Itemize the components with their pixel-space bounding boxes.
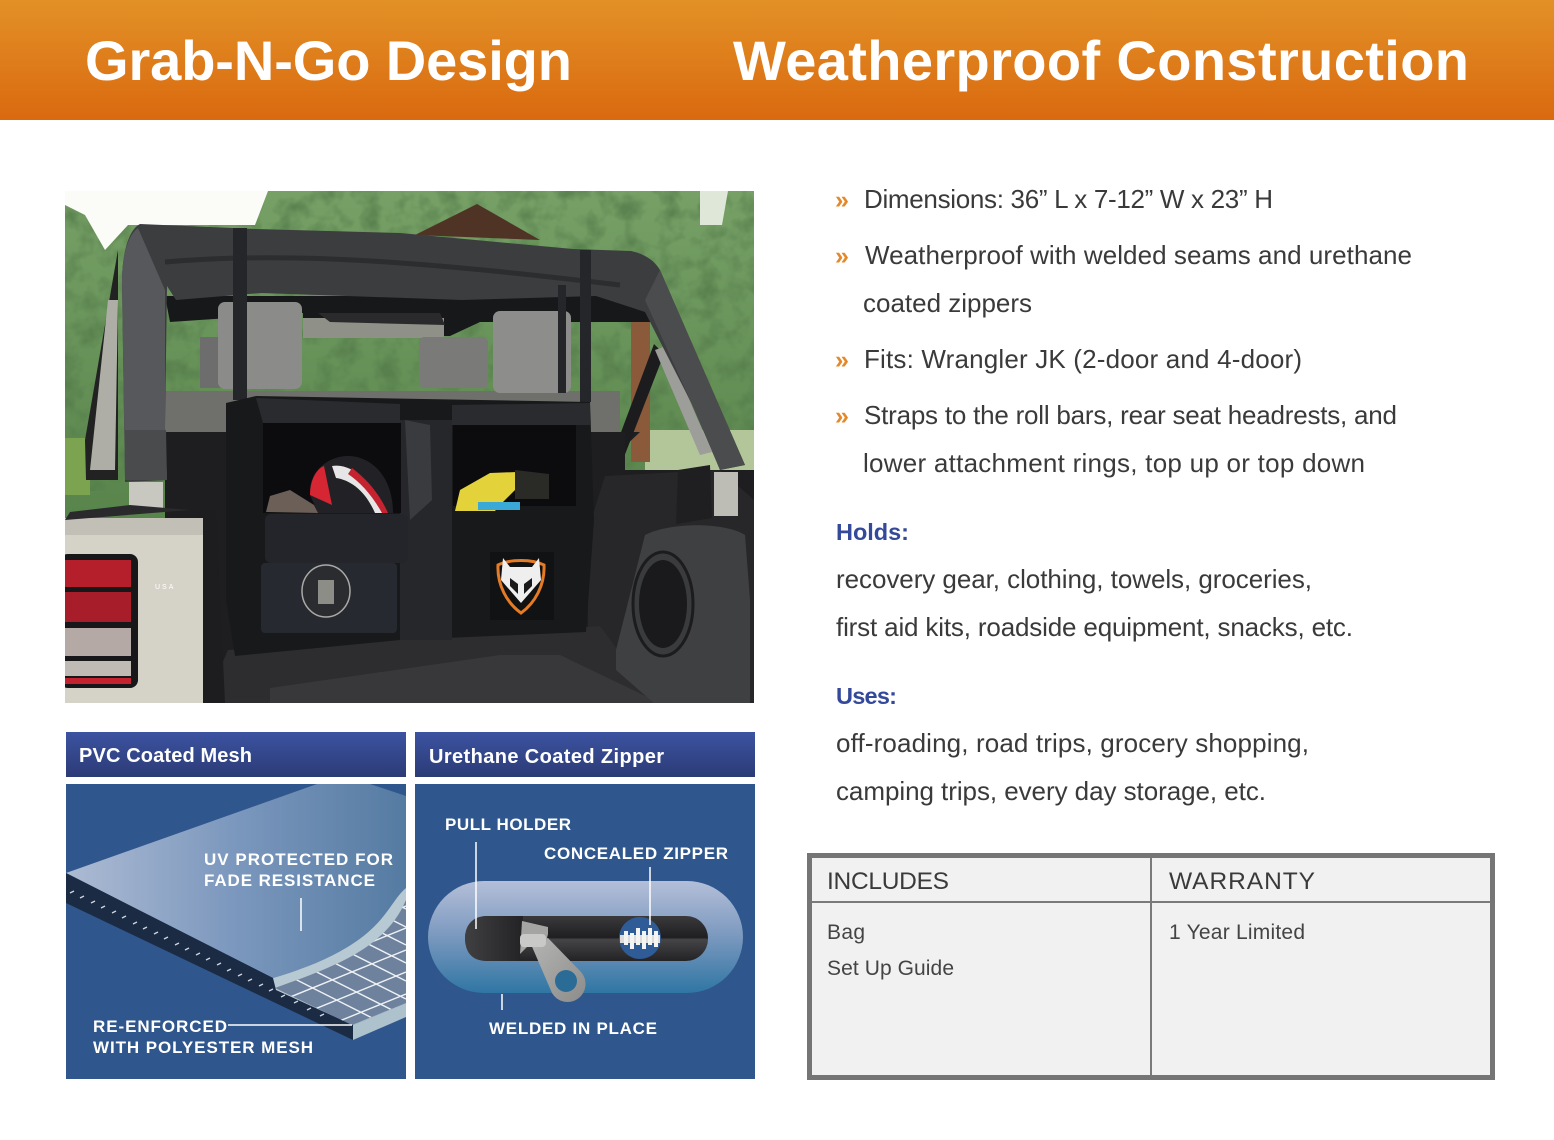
header bar: Urethane Coated Zipper bbox=[415, 732, 755, 777]
callout: polyester mesh: WITH POLYESTER MESH bbox=[93, 1038, 313, 1057]
roll pocket bbox=[265, 514, 408, 563]
tailgate: USA bbox=[155, 584, 175, 591]
callout: pull holder: PULL HOLDER bbox=[445, 815, 571, 834]
callout: UV protection: UV PROTECTED FOR bbox=[204, 850, 393, 869]
interior dark base bbox=[216, 432, 754, 662]
callout: concealed zipper: CONCEALED ZIPPER bbox=[544, 844, 728, 863]
callout: UV protection bbox=[204, 850, 393, 931]
label: Urethane Coated Zipper: Urethane Coated Zipper bbox=[429, 746, 664, 768]
column: warranty: 1 Year Limited bbox=[1169, 921, 1305, 944]
bullet: weatherproof bbox=[835, 240, 1412, 318]
tail light bbox=[60, 554, 138, 688]
rear seat bbox=[165, 391, 625, 470]
column: warranty bbox=[1169, 868, 1315, 944]
heading: Grab-N-Go Design: Grab-N-Go Design bbox=[85, 29, 572, 92]
logo pocket panel bbox=[490, 552, 554, 620]
column: includes bbox=[827, 868, 954, 980]
mesh layer bbox=[273, 888, 406, 1040]
bullet: weatherproof: Weatherproof with welded seams and urethane bbox=[865, 240, 1412, 270]
wolf shield logo bbox=[498, 558, 544, 613]
text block: uses bbox=[836, 683, 1309, 806]
black storage bag bbox=[226, 396, 594, 656]
helmet bbox=[310, 456, 393, 513]
label: PVC Coated Mesh: PVC Coated Mesh bbox=[79, 745, 252, 767]
sleeping bag roll bbox=[261, 563, 397, 633]
top coated sheet bbox=[66, 784, 406, 978]
diagram: PVC coated mesh bbox=[66, 784, 406, 1079]
diagram: urethane coated zipper bbox=[415, 784, 755, 1079]
bullet: straps bbox=[835, 400, 1397, 478]
bullet: fits: Fits: Wrangler JK (2-door and 4-door) bbox=[864, 344, 1302, 374]
text block: holds: first aid kits, roadside equipment, snacks, etc. bbox=[836, 612, 1353, 642]
feature list bbox=[835, 184, 1412, 478]
tailgate bbox=[65, 505, 225, 703]
callout: UV protection: FADE RESISTANCE bbox=[204, 871, 375, 890]
text block: uses: camping trips, every day storage, etc. bbox=[836, 776, 1266, 806]
bullet: straps: » bbox=[835, 402, 849, 430]
rear post and bracket bbox=[678, 465, 738, 516]
column: includes: INCLUDES bbox=[827, 868, 949, 895]
straps bbox=[233, 228, 591, 402]
text block: uses: Uses: bbox=[836, 683, 897, 709]
zipper slot bbox=[465, 916, 708, 961]
welded pill surround bbox=[428, 881, 743, 993]
header banner bbox=[0, 0, 1554, 120]
bullet: straps: Straps to the roll bars, rear seat headrests, and bbox=[864, 400, 1397, 430]
bullet: fits: » bbox=[835, 346, 849, 374]
concealed zipper detail bbox=[619, 917, 661, 959]
pull holder bbox=[465, 916, 523, 961]
text block: holds: recovery gear, clothing, towels, groceries, bbox=[836, 564, 1312, 594]
yellow recovery strap bbox=[455, 470, 549, 511]
product photo: storage bag in Jeep bbox=[60, 191, 754, 704]
header bar: PVC Coated Mesh bbox=[66, 732, 406, 777]
callout: polyester mesh bbox=[93, 1020, 352, 1053]
table: includes and warranty bbox=[810, 856, 1492, 1078]
text block: holds: Holds: bbox=[836, 519, 909, 545]
callout: welded in place: WELDED IN PLACE bbox=[489, 1019, 657, 1038]
bullet: weatherproof: » bbox=[835, 242, 849, 270]
heading: Weatherproof Construction: Weatherproof Construction bbox=[733, 29, 1469, 92]
text block: uses: off-roading, road trips, grocery shopping, bbox=[836, 728, 1309, 758]
text block: holds bbox=[836, 519, 1353, 642]
column: warranty: WARRANTY bbox=[1169, 868, 1315, 895]
bullet: weatherproof: coated zippers bbox=[863, 288, 1032, 318]
sheet edge with stitches bbox=[66, 873, 353, 1040]
pocket openings bbox=[263, 423, 576, 513]
headrests bbox=[200, 302, 571, 393]
bullet: straps: lower attachment rings, top up or top down bbox=[863, 448, 1365, 478]
rear cargo floor and side wall bbox=[205, 470, 754, 703]
bullet: dimensions: » bbox=[835, 186, 849, 214]
zipper pull tab bbox=[520, 921, 586, 1002]
bullet: dimensions: Dimensions: 36” L x 7-12” W x 23” H bbox=[864, 184, 1273, 214]
rope bbox=[266, 490, 318, 513]
column: includes: Bag bbox=[827, 921, 865, 944]
column: includes: Set Up Guide bbox=[827, 957, 954, 980]
callout: polyester mesh: RE-ENFORCED bbox=[93, 1017, 227, 1036]
soft top roll bar bbox=[122, 224, 745, 509]
callout: pull holder bbox=[445, 815, 571, 929]
speaker housing bbox=[616, 525, 750, 704]
